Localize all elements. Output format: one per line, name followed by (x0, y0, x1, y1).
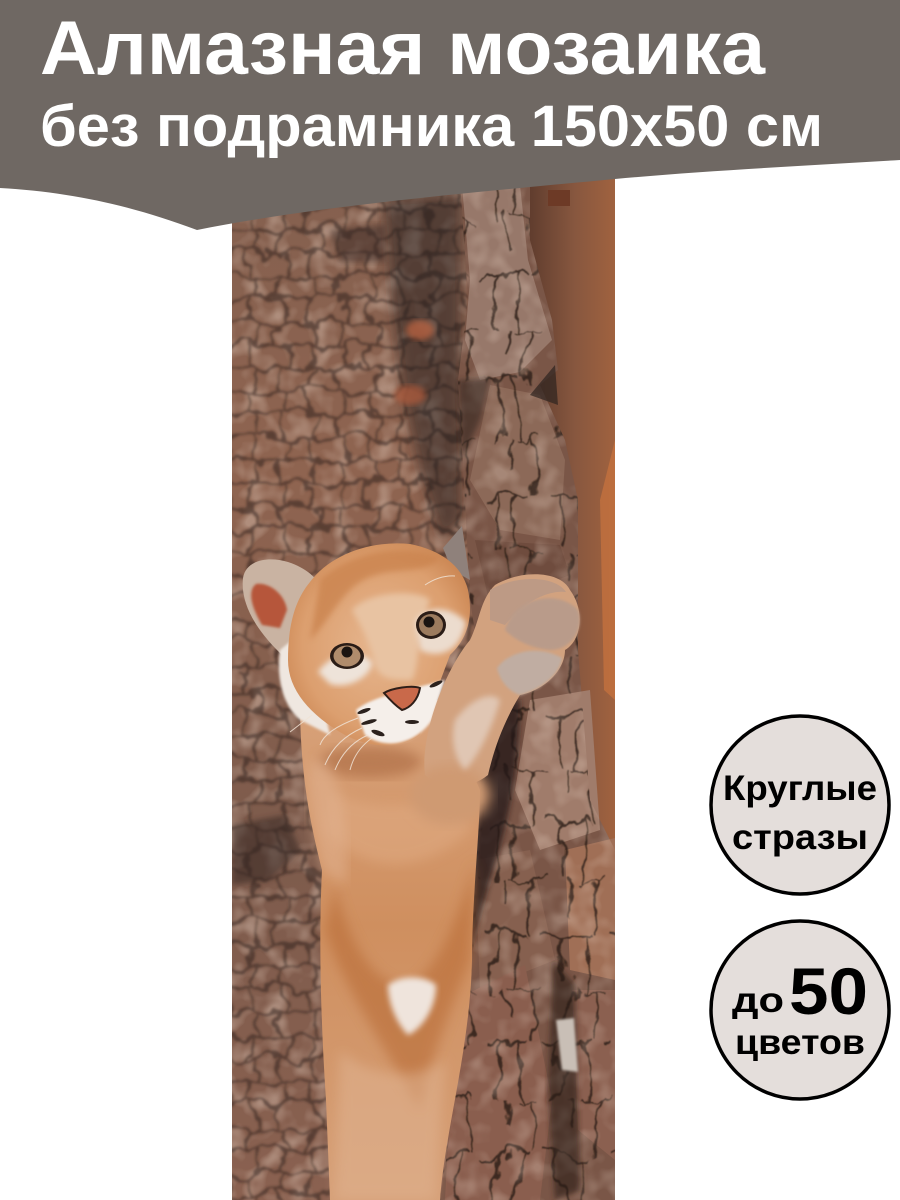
white chest tuft (388, 978, 436, 1035)
title: Алмазная мозаика (40, 6, 766, 91)
cougar near ear (242, 559, 314, 654)
nose (384, 687, 420, 710)
cougar far ear (443, 526, 470, 580)
cougar head (279, 543, 470, 770)
right eye (416, 611, 446, 639)
badge: up to 50 colours: цветов (735, 1023, 865, 1062)
left eye (330, 643, 364, 669)
badge: round rhinestones: Круглые (723, 769, 877, 808)
tree trunk (430, 170, 620, 1200)
badge: up to 50 colours: до (732, 981, 784, 1020)
badge: up to 50 colours (711, 921, 889, 1099)
badge: round rhinestones: стразы (732, 818, 868, 857)
subtitle: без подрамника 150х50 см (40, 94, 823, 159)
muzzle markings (357, 679, 443, 738)
cougar foreleg and paw (410, 574, 580, 825)
whiskers (290, 576, 455, 770)
badge: round rhinestones (711, 716, 889, 894)
cougar body (300, 700, 480, 1200)
photo: cougar cub climbing a tree (215, 160, 620, 1200)
header banner (0, 0, 900, 230)
background bark (232, 194, 488, 1200)
badge: up to 50 colours: 50 (789, 954, 868, 1028)
